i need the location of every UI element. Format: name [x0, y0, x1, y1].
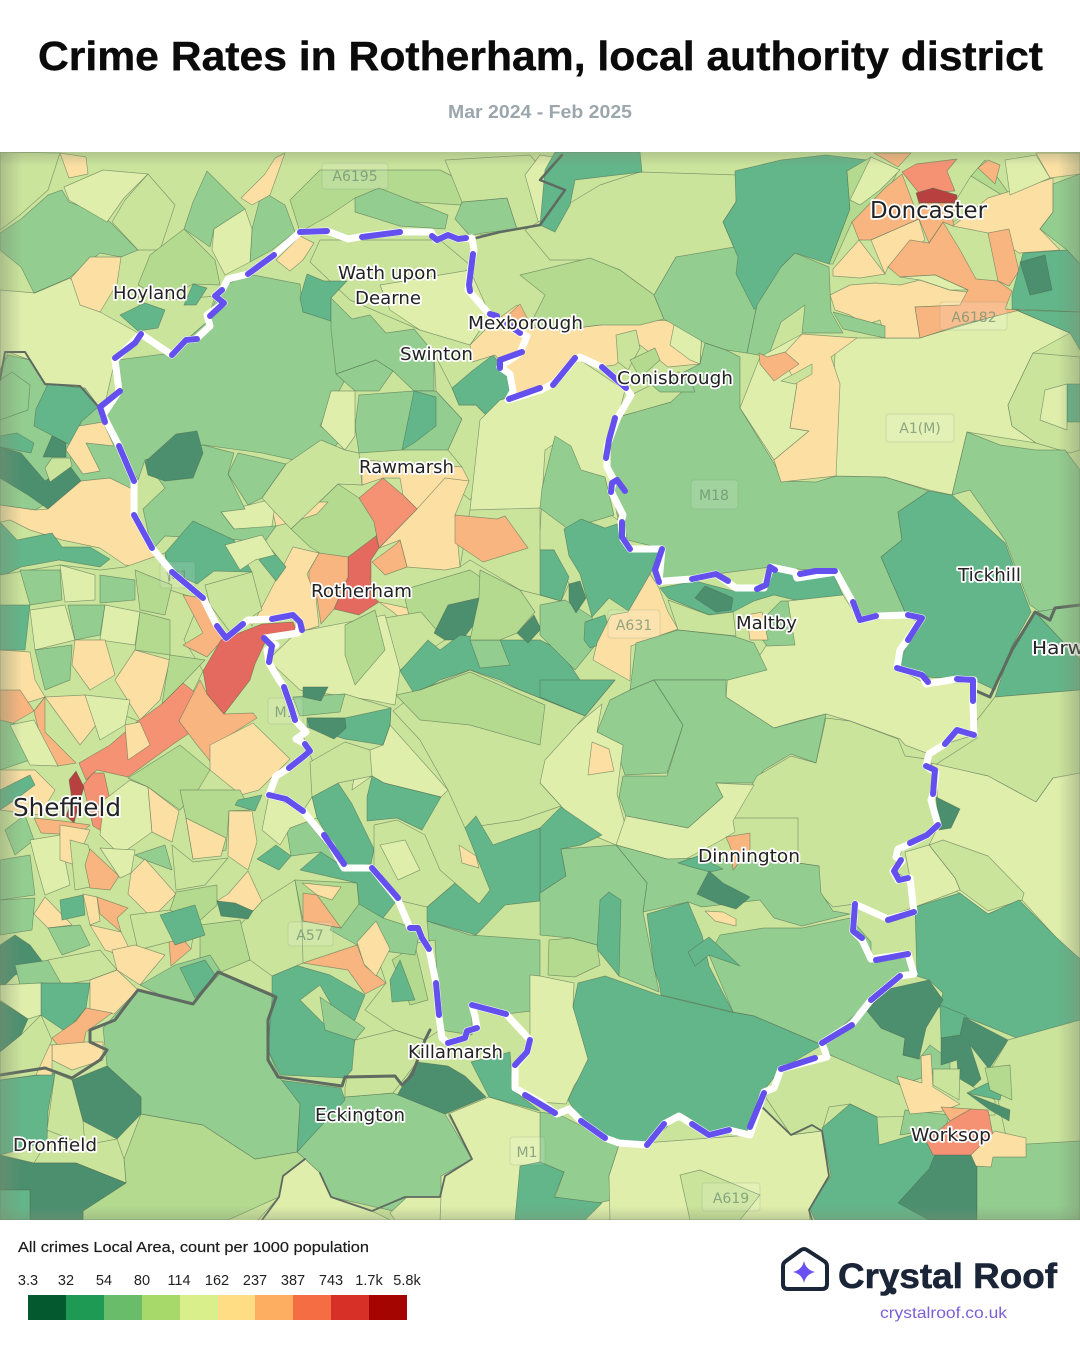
label: Doncaster: Doncaster	[870, 198, 988, 224]
title: Crime Rates in Rotherham, local authority district	[38, 33, 1043, 79]
legend values: 387	[281, 1273, 305, 1289]
road labels: A631	[616, 618, 652, 634]
east south	[935, 690, 1080, 802]
label: Wath upon Dearne	[338, 263, 437, 309]
label: Rotherham: Rotherham	[311, 581, 412, 602]
legend values: 743	[319, 1273, 343, 1289]
road labels: A57	[296, 928, 324, 944]
place labels	[13, 198, 1080, 1156]
mid bottom south-west	[471, 1052, 540, 1111]
logo: Crystal Roof	[783, 1249, 1057, 1322]
label: Hoyland: Hoyland	[113, 283, 187, 304]
road labels: M18	[699, 488, 729, 504]
purple dashes	[100, 231, 974, 1145]
website: crystalroof.co.uk	[880, 1305, 1008, 1322]
legend values: 237	[243, 1273, 267, 1289]
Bottom south	[440, 1097, 615, 1220]
south of Doncaster	[831, 310, 1070, 495]
road labels: A619	[713, 1191, 749, 1207]
legend values: 80	[134, 1273, 150, 1289]
big M18 green	[607, 343, 929, 620]
area polygons	[0, 152, 1080, 1220]
label: Dinnington: Dinnington	[698, 846, 800, 867]
label: Eckington: Eckington	[315, 1105, 405, 1126]
legend values: 32	[58, 1273, 74, 1289]
Rotherham district boundary	[100, 231, 974, 1145]
legend values	[18, 1273, 421, 1289]
dark top	[540, 152, 642, 232]
label: Killamarsh: Killamarsh	[408, 1042, 503, 1063]
south-west	[268, 965, 365, 1078]
label: Wath upon Dearne: Wath upon	[338, 263, 437, 284]
legend values: 5.8k	[393, 1273, 421, 1289]
big west green	[103, 274, 376, 480]
road labels: M1	[168, 569, 188, 585]
Rotherham centre	[470, 360, 625, 530]
legend	[18, 1240, 421, 1320]
Sheffield mosaic	[0, 553, 203, 721]
road labels: A6195	[332, 169, 378, 185]
road labels: M1	[516, 1145, 538, 1161]
north centre	[525, 172, 738, 295]
map base	[0, 152, 1080, 1220]
label: Mexborough: Mexborough	[468, 313, 583, 334]
road labels: M1	[274, 705, 296, 721]
legend values: 3.3	[18, 1273, 38, 1289]
Tickhill	[881, 491, 1031, 690]
label: Rawmarsh: Rawmarsh	[359, 457, 454, 478]
header	[38, 33, 1043, 122]
label: Sheffield: Sheffield	[13, 793, 121, 822]
wordmark: Crystal Roof	[838, 1257, 1057, 1296]
legend values: 162	[205, 1273, 229, 1289]
north-west	[0, 278, 140, 412]
label: Worksop: Worksop	[911, 1125, 991, 1146]
road labels: A1(M)	[899, 421, 941, 437]
county boundaries	[0, 155, 1080, 1220]
road labels	[160, 163, 1007, 1211]
label: Harworth cut off at edge: Harw	[1032, 638, 1080, 659]
label: Tickhill: Tickhill	[957, 565, 1021, 586]
label: Maltby: Maltby	[736, 613, 797, 634]
label: Wath upon Dearne: Dearne	[355, 288, 421, 309]
legend values: 1.7k	[355, 1273, 383, 1289]
legend values: 114	[167, 1273, 191, 1289]
centre-south	[540, 680, 615, 716]
legend colour scale	[28, 1295, 407, 1320]
east around Worksop	[822, 1000, 950, 1100]
legend title: All crimes Local Area, count per 1000 population	[18, 1240, 369, 1256]
west of boundary	[0, 355, 134, 515]
Mexborough band	[470, 305, 702, 398]
label: Swinton: Swinton	[400, 344, 473, 365]
label: Conisbrough: Conisbrough	[617, 368, 733, 389]
subtitle: Mar 2024 - Feb 2025	[448, 101, 632, 122]
icon: house with star	[783, 1249, 827, 1289]
map: crime rates choropleth	[0, 152, 1080, 1220]
Doncaster	[829, 157, 898, 264]
label: Dronfield: Dronfield	[13, 1135, 97, 1156]
white boundary line	[103, 231, 974, 1145]
legend values: 54	[96, 1273, 112, 1289]
road labels: A6182	[951, 310, 997, 326]
footer	[18, 1240, 1058, 1322]
